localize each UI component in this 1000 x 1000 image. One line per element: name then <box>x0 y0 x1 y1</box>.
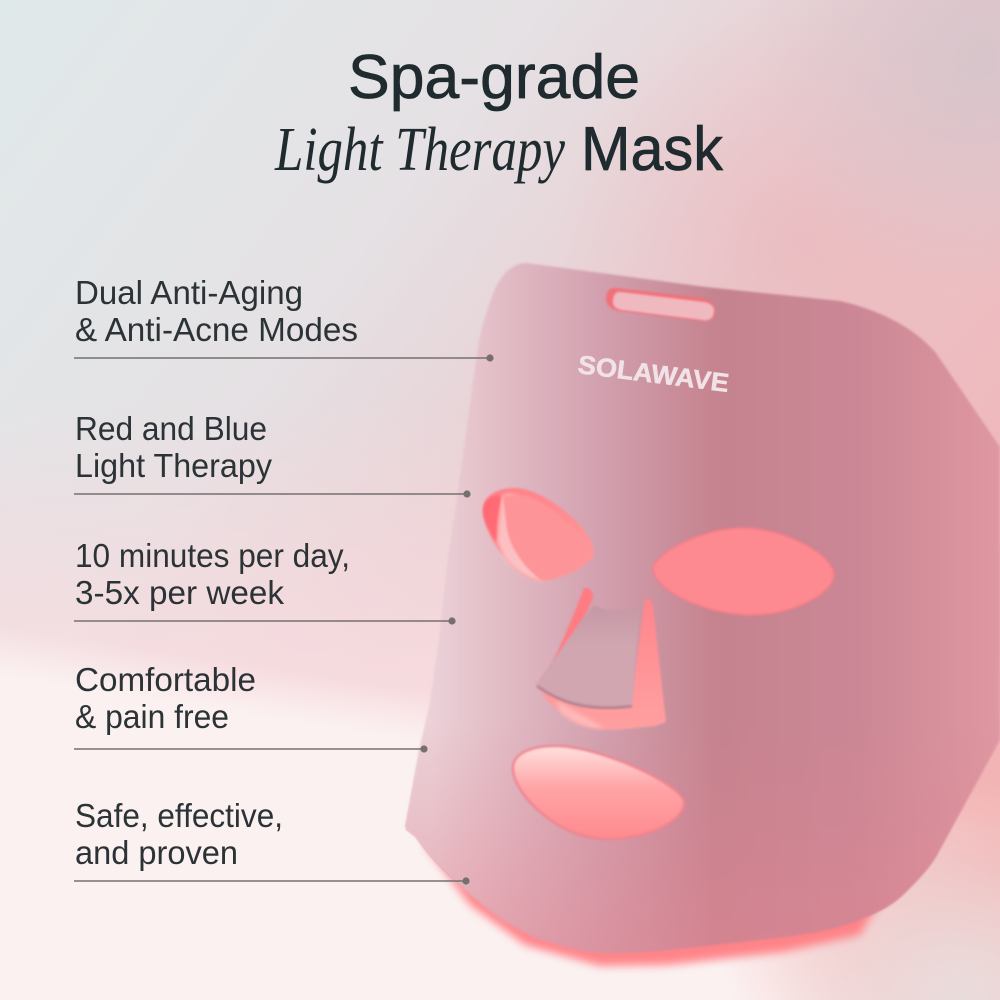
feature: safety: and proven <box>75 834 238 871</box>
title line two italic: Light Therapy <box>274 116 565 184</box>
logo: SOLAWAVE <box>576 349 731 398</box>
light therapy mask <box>400 263 1000 960</box>
nose flap <box>536 604 640 708</box>
title line two bold: Mask <box>581 115 724 184</box>
nose opening <box>540 588 666 730</box>
feature: safety: Safe, effective, <box>75 797 283 834</box>
feature: safety <box>74 797 470 885</box>
feature: red and blue light: Red and Blue <box>75 410 267 447</box>
feature: dual modes: & Anti-Acne Modes <box>75 311 358 348</box>
mask body <box>405 263 1000 953</box>
feature: red and blue light: Light Therapy <box>75 447 272 484</box>
mouth opening <box>513 746 684 839</box>
strap slot <box>606 288 715 321</box>
feature: comfort <box>74 661 428 753</box>
title line one: Spa-grade <box>348 43 640 112</box>
feature: comfort: & pain free <box>75 698 229 735</box>
feature: treatment time: 3-5x per week <box>75 574 285 611</box>
title <box>274 43 724 184</box>
feature: dual modes <box>74 274 494 362</box>
left eye opening <box>483 488 594 581</box>
feature: red and blue light <box>74 410 471 498</box>
feature: treatment time <box>74 537 456 625</box>
right eye opening <box>653 528 834 615</box>
feature: comfort: Comfortable <box>75 661 256 698</box>
mask lower tint <box>405 764 944 952</box>
mask glow on floor <box>425 800 880 966</box>
feature: dual modes: Dual Anti-Aging <box>75 274 303 311</box>
feature: treatment time: 10 minutes per day, <box>75 537 350 574</box>
